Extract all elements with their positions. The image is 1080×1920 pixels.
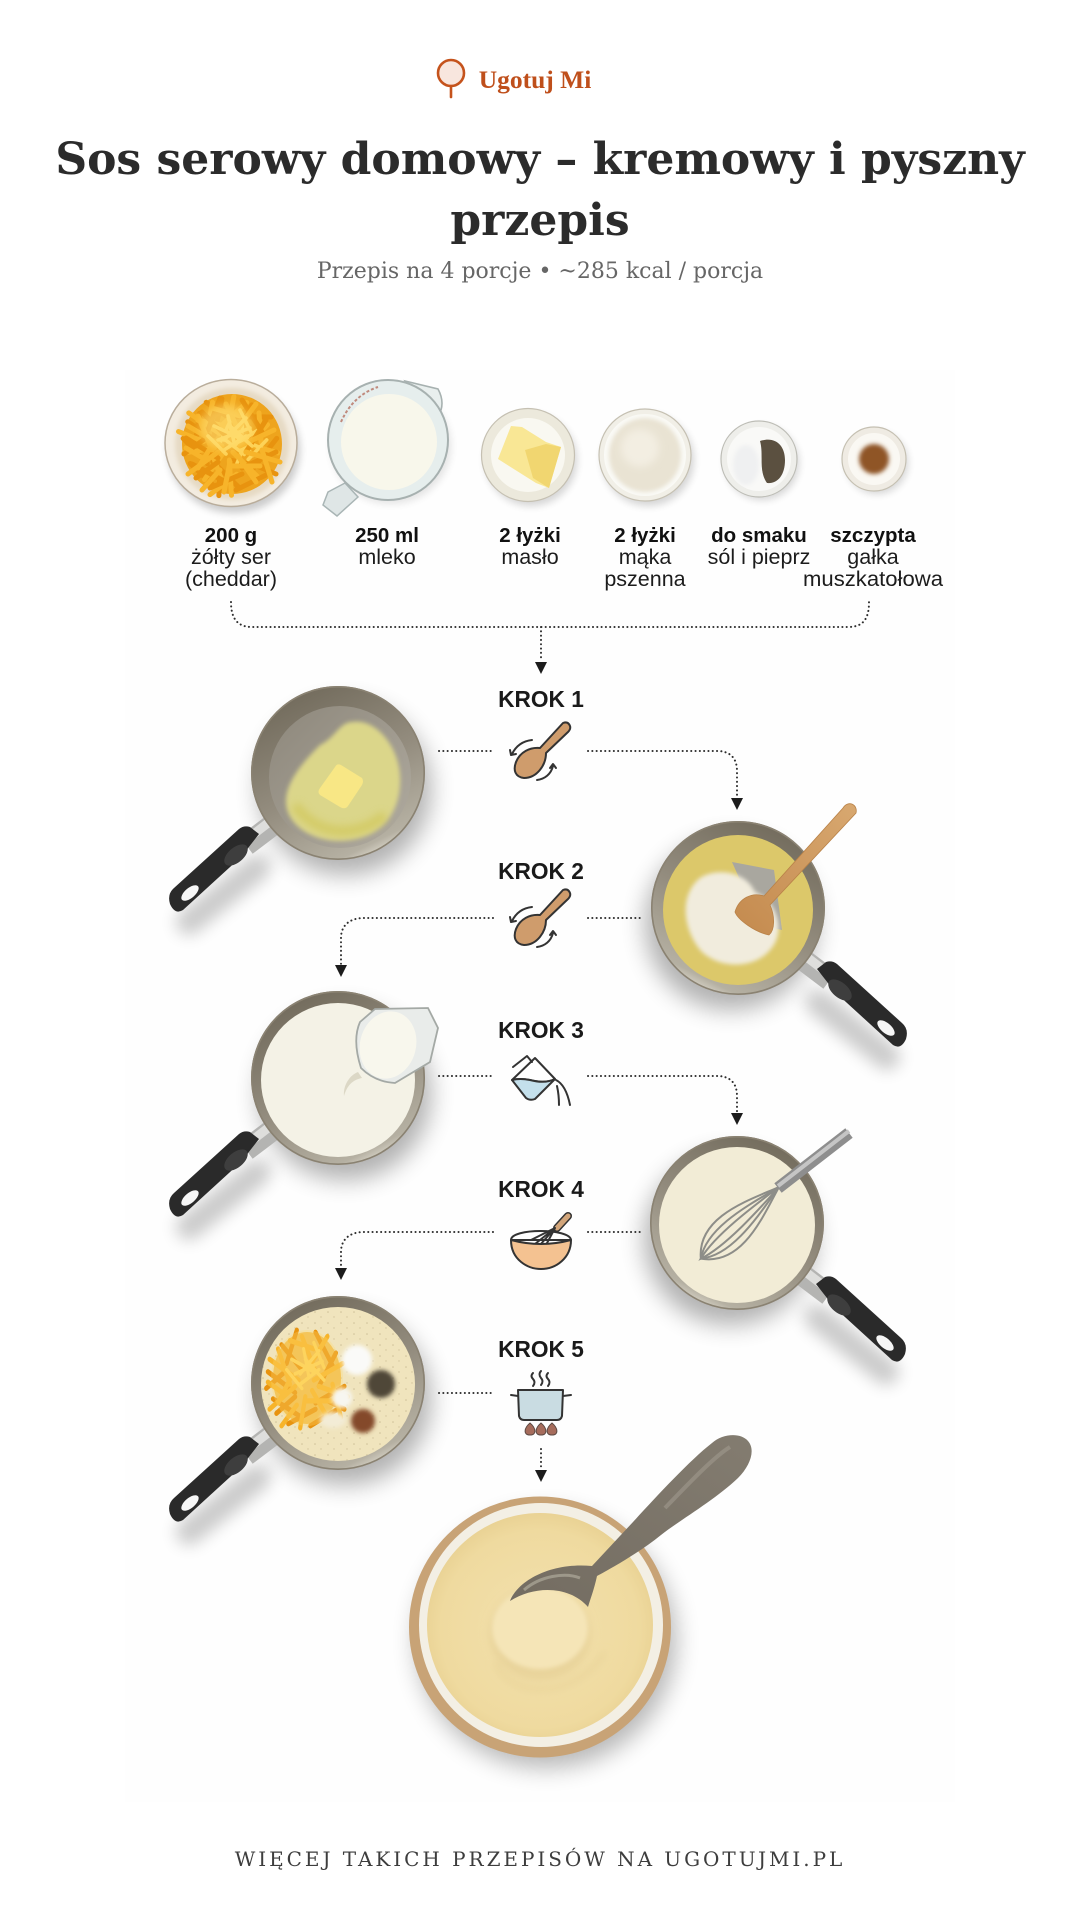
pan: whisking sauce: [644, 1131, 906, 1372]
ingredient: milk jug: [323, 380, 451, 516]
connector: step 3 left: [439, 1075, 493, 1077]
connector: step 4 right: [588, 1231, 642, 1233]
ingredient labels: szczypta: [830, 524, 916, 547]
ingredient labels: gałka: [847, 545, 899, 569]
ingredient labels: do smaku: [711, 524, 807, 547]
ingredient labels: 200 g: [205, 524, 257, 547]
illustration backdrop: [125, 370, 955, 1802]
whisk: [689, 1131, 849, 1272]
step 1 heading: KROK 1: [498, 686, 584, 712]
step 4 heading: KROK 4: [498, 1176, 584, 1202]
ingredient: butter plate: [482, 408, 577, 506]
ingredient: nutmeg dish: [842, 427, 908, 494]
final bowl of cheese sauce: [409, 1435, 752, 1768]
step 3 heading: KROK 3: [498, 1017, 584, 1043]
subtitle: Przepis na 4 porcje • ~285 kcal / porcja: [317, 259, 763, 284]
ingredient labels: [185, 524, 943, 591]
serving spoon: [510, 1435, 752, 1607]
arrow: step 3 to step 4: [588, 1076, 743, 1125]
arrow: step 2 to step 3: [335, 918, 493, 977]
ingredient labels: mleko: [358, 545, 416, 569]
ingredient labels: mąka: [619, 545, 671, 569]
ingredient labels: 2 łyżki: [499, 524, 561, 547]
ingredients row: [165, 380, 943, 591]
icon: pouring jug: [512, 1056, 570, 1105]
ingredient labels: 2 łyżki: [614, 524, 676, 547]
ingredient labels: sól i pieprz: [708, 545, 810, 569]
ingredient labels: pszenna: [604, 567, 686, 591]
title: przepis: [450, 195, 630, 246]
title: [55, 134, 1026, 246]
logo: [438, 60, 591, 97]
icon: wooden spoon stirring (step 2): [510, 889, 570, 947]
icon: simmering pot: [511, 1371, 571, 1435]
arrow: step 4 to step 5: [335, 1232, 493, 1280]
pan: melted butter: [169, 686, 431, 922]
arrow: ingredients bracket to step 1: [231, 602, 869, 674]
icon: wooden spoon stirring (step 1): [510, 722, 570, 780]
logo: Ugotuj Mi: [479, 65, 591, 94]
footer: WIĘCEJ TAKICH PRZEPISÓW NA UGOTUJMI.PL: [235, 1846, 845, 1871]
ingredient labels: masło: [501, 545, 559, 569]
ingredient labels: (cheddar): [185, 567, 277, 591]
pan: cheese and spices: [169, 1296, 431, 1532]
milk measuring cup: [344, 1005, 438, 1096]
ingredient labels: muszkatołowa: [803, 567, 943, 591]
ingredient labels: żółty ser: [191, 545, 271, 569]
arrow: step 5 to final bowl: [535, 1449, 547, 1482]
connector: step 5 left: [439, 1392, 493, 1394]
arrow: step 1 to step 2: [588, 751, 743, 810]
ingredient labels: 250 ml: [355, 524, 419, 547]
icon: whisk and bowl: [511, 1216, 571, 1269]
pan: pouring milk: [169, 991, 438, 1227]
connector: step 2 right: [588, 917, 642, 919]
title: Sos serowy domowy – kremowy i pyszny: [55, 134, 1026, 185]
step 2 heading: KROK 2: [498, 858, 584, 884]
ingredient: flour plate: [599, 409, 694, 506]
ingredient: cheese bowl: [165, 380, 300, 513]
step 5 heading: KROK 5: [498, 1336, 584, 1362]
pan: flour and butter with wooden spoon: [645, 804, 907, 1057]
ingredient: salt and pepper dish: [721, 421, 799, 500]
connector: step 1 left: [439, 750, 493, 752]
